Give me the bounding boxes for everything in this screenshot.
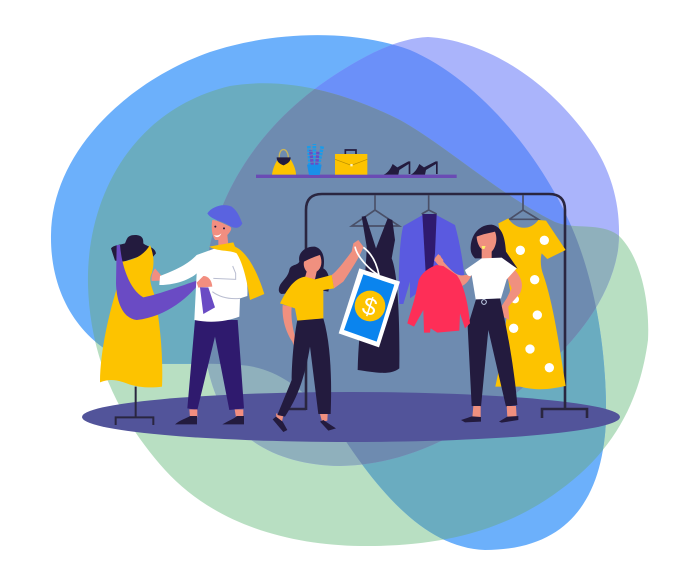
shoes bbox=[461, 416, 518, 423]
right hand bbox=[197, 276, 212, 288]
ankles bbox=[472, 406, 517, 417]
red jacket bbox=[407, 254, 470, 333]
belt buckle bbox=[482, 300, 486, 304]
shoes bbox=[175, 416, 244, 424]
scarf bbox=[209, 242, 264, 300]
white top bbox=[465, 258, 517, 299]
yellow dress bbox=[100, 245, 162, 387]
mannequin with dress bbox=[100, 235, 203, 425]
woman holding red jacket bbox=[434, 225, 522, 423]
background blobs bbox=[51, 35, 648, 550]
polka dot dress with hanger bbox=[495, 195, 566, 389]
lower arm bbox=[283, 305, 303, 353]
icon: yellow handbag bbox=[272, 150, 296, 175]
shoes bbox=[273, 417, 336, 432]
feet bbox=[276, 413, 328, 422]
left hand bbox=[151, 268, 162, 281]
coin bbox=[355, 291, 385, 321]
hanger 2 bbox=[422, 195, 437, 214]
tag body bbox=[339, 268, 400, 347]
hanger 1 bbox=[352, 195, 399, 226]
black dress bbox=[358, 216, 399, 373]
face bbox=[304, 255, 321, 279]
stand bbox=[116, 387, 153, 425]
ankles bbox=[189, 409, 243, 417]
holding fingers bbox=[435, 254, 443, 266]
mannequin bust bbox=[111, 235, 156, 262]
face bbox=[477, 232, 496, 259]
dollar sign: $ bbox=[359, 292, 380, 322]
blue jacket bbox=[399, 215, 465, 304]
hair bbox=[471, 225, 518, 269]
floor ellipse bbox=[82, 392, 620, 442]
hanging cloth bbox=[200, 287, 215, 314]
purple sash bbox=[116, 245, 203, 320]
sweater bbox=[159, 247, 247, 322]
tag panel bbox=[344, 274, 394, 342]
trousers bbox=[187, 320, 244, 410]
black trousers bbox=[277, 318, 331, 417]
hat bbox=[207, 205, 242, 228]
tag string bbox=[355, 247, 379, 275]
woman holding price tag bbox=[273, 240, 363, 432]
price tag bbox=[339, 247, 400, 347]
icon: briefcase bbox=[335, 150, 367, 175]
hangers and garments bbox=[352, 195, 465, 373]
man with hat and scarf bbox=[151, 205, 264, 424]
icon: high heel shoes bbox=[384, 161, 438, 175]
yellow top bbox=[280, 275, 334, 321]
face bbox=[212, 220, 231, 247]
illustration: clothing boutique scene bbox=[51, 35, 648, 550]
hand on hip arm bbox=[499, 270, 522, 320]
clothes rack bbox=[289, 194, 587, 418]
jacket lining bbox=[422, 214, 437, 273]
shelf with accessories bbox=[256, 144, 457, 178]
raised arm bbox=[332, 240, 363, 288]
shelf board bbox=[256, 175, 457, 178]
black trousers bbox=[468, 298, 517, 407]
icon: potted plant bbox=[307, 144, 322, 175]
raised arm bbox=[434, 255, 472, 287]
hair bbox=[279, 247, 329, 294]
